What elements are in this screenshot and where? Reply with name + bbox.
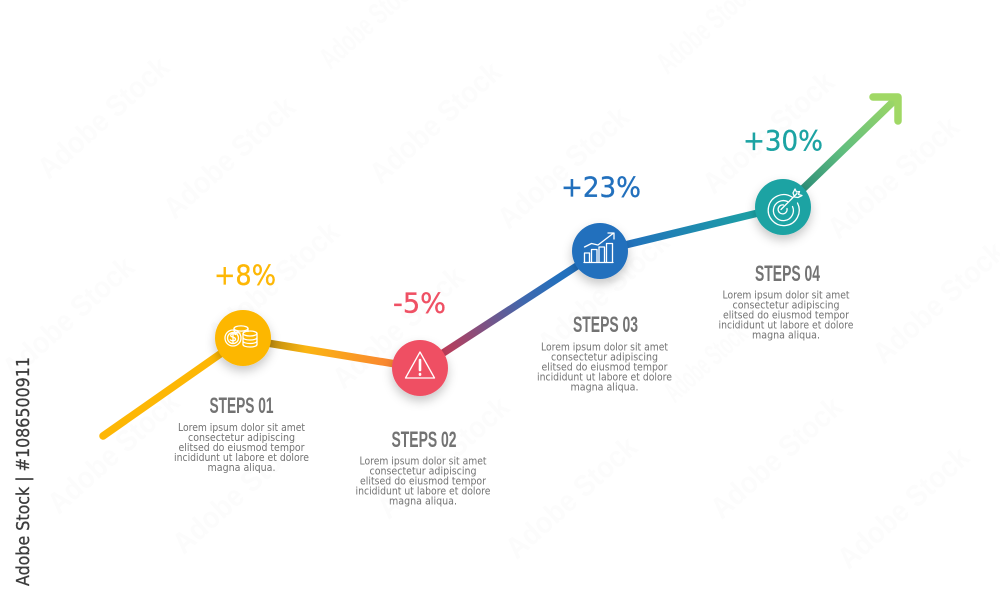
text block: step 01 description: Lorem ipsum dolor sit amet (178, 422, 305, 434)
marker: step 02 circle (392, 340, 448, 396)
panel: step 02 (356, 286, 490, 508)
panel: step 04 (718, 124, 854, 342)
icon: coins (225, 326, 257, 347)
background watermark: Adobe Stock (31, 50, 176, 185)
text block: step 03 description: Lorem ipsum dolor sit amet (541, 342, 668, 354)
text block: step 03 description: consectetur adipiscing (551, 352, 658, 364)
text block: step 02 description: consectetur adipiscing (370, 466, 476, 478)
segment: step 02 to step 03 (420, 251, 600, 368)
text block: step 03 description: magna aliqua. (570, 382, 638, 394)
arrow: step 04 to top right (783, 97, 898, 208)
text block: step 01 description (174, 422, 309, 474)
segment: start to step 01 (103, 338, 243, 436)
panel: step 01 (174, 258, 309, 474)
icon: target with dart (768, 189, 802, 226)
text block: step 02 description: elitsed do eiusmod tempor (360, 476, 487, 488)
heading: steps 01: STEPS 01 (210, 393, 274, 418)
segment: step 01 to step 02 (243, 339, 420, 368)
text block: step 04 description: magna aliqua. (752, 330, 820, 342)
background watermark: Adobe Stock (371, 390, 516, 525)
text block: step 03 description (537, 342, 672, 394)
text block: step 02 description: incididunt ut labore et dolore (356, 486, 490, 498)
value: +8%: +8% (214, 258, 276, 292)
text block: step 02 description (356, 456, 490, 508)
segment: step 03 to step 04 (600, 207, 783, 251)
text block: step 01 description: elitsed do eiusmod tempor (178, 442, 305, 454)
background watermark: Adobe Stock (166, 425, 311, 560)
value: +30%: +30% (743, 124, 823, 157)
background watermark: Adobe Stock (821, 110, 966, 245)
heading: steps 02: STEPS 02 (392, 427, 456, 452)
marker: step 04 circle (755, 179, 811, 235)
heading: steps 03: STEPS 03 (573, 312, 638, 337)
value: +23%: +23% (561, 170, 641, 204)
stock image credit: Adobe Stock | #1086500911 (13, 357, 34, 586)
text block: step 02 description: magna aliqua. (389, 496, 457, 508)
value: -5%: -5% (393, 286, 446, 320)
text block: step 01 description: incididunt ut labore et dolore (174, 452, 309, 464)
background watermark: Adobe Stock (326, 260, 471, 395)
text block: step 01 description: magna aliqua. (208, 462, 276, 474)
background watermark: Adobe Stock (201, 215, 346, 350)
text block: step 04 description: incididunt ut labore et dolore (718, 320, 854, 332)
marker: step 01 circle (215, 310, 271, 366)
background watermark: Adobe Stock (831, 440, 976, 575)
text block: step 03 description: elitsed do eiusmod tempor (542, 362, 668, 374)
background watermark: Adobe Stock (696, 65, 841, 200)
background watermark: Adobe Stock (157, 90, 302, 225)
text block: step 04 description (718, 290, 854, 342)
text block: step 04 description: consectetur adipiscing (732, 300, 840, 312)
icon: growth bar chart (584, 233, 614, 262)
text block: step 04 description: elitsed do eiusmod tempor (723, 310, 850, 322)
background watermark: Adobe Stock (0, 250, 141, 385)
background watermark: Adobe Stock (363, 55, 508, 190)
background watermark: Adobe Stock (499, 430, 644, 565)
text block: step 03 description: incididunt ut labore et dolore (537, 372, 672, 384)
icon: warning triangle (406, 352, 434, 378)
marker: step 03 circle (572, 223, 628, 279)
heading: steps 04: STEPS 04 (755, 261, 820, 286)
text block: step 02 description: Lorem ipsum dolor sit amet (360, 456, 486, 468)
background watermark: Adobe Stock (657, 317, 754, 409)
rising line chart path (103, 97, 898, 436)
panel: step 03 (537, 170, 672, 394)
background watermark: Adobe Stock (531, 225, 676, 360)
background watermark: Adobe Stock (491, 100, 636, 235)
text block: step 01 description: consectetur adipiscing (188, 432, 295, 444)
text block: step 04 description: Lorem ipsum dolor sit amet (722, 290, 850, 302)
background watermark: Adobe Stock (704, 390, 849, 525)
background watermark: Adobe Stock (41, 385, 186, 520)
